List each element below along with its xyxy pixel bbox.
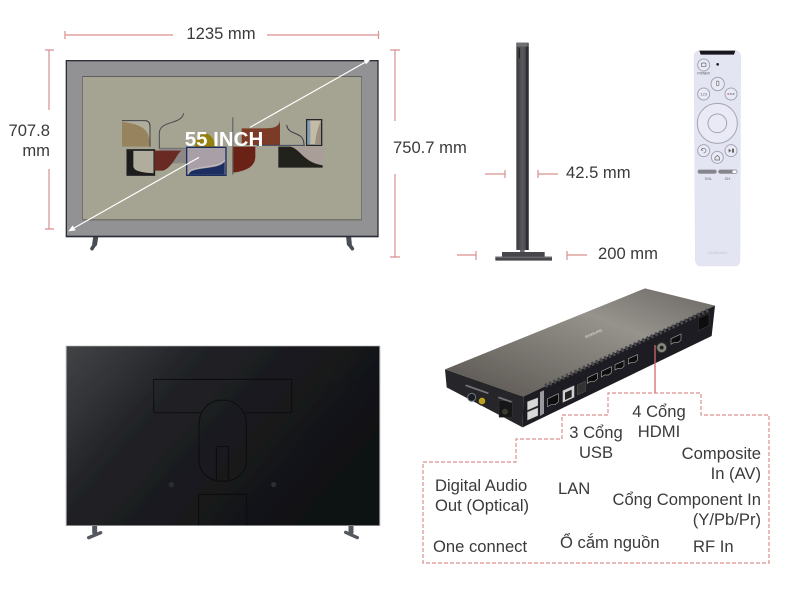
- port label: Digital Audio: Out (Optical): [435, 496, 529, 515]
- connector line to ports: [654, 345, 656, 393]
- TV feet: [92, 237, 352, 249]
- dimension: stand 200 mm: 200 mm: [598, 244, 658, 263]
- port label: Digital Audio: Digital Audio: [435, 476, 527, 495]
- dimension: height 750.7 mm: [390, 50, 467, 257]
- side profile: [495, 43, 552, 261]
- panel: One Connect box: [445, 288, 715, 427]
- artwork: [122, 113, 323, 175]
- back feet: [89, 527, 357, 538]
- volume and channel rockers: VOL: [705, 177, 712, 181]
- dimension: height 750.7 mm: 750.7 mm: [393, 138, 467, 157]
- ports: [466, 314, 709, 420]
- dimension: height 707.8 mm: [8, 50, 54, 229]
- port label: RF In: RF In: [693, 537, 734, 556]
- remote glyphs: 123: [700, 91, 708, 96]
- port label: 4 Cổng HDMI: HDMI: [638, 422, 680, 441]
- port label: One connect: One connect: [433, 537, 527, 556]
- dimension: depth 42.5 mm: [485, 163, 631, 182]
- port label: LAN: LAN: [558, 479, 590, 498]
- dimension: stand 200 mm: [457, 244, 658, 263]
- dashed ports callout: [423, 393, 769, 563]
- panel: front view of TV: [8, 24, 467, 257]
- port label: 3 Cổng USB: 3 Cổng: [569, 423, 623, 442]
- volume and channel rockers: [698, 170, 737, 181]
- port label: Composite In: Composite: [682, 444, 761, 463]
- port label: Composite In: In (AV): [711, 464, 761, 483]
- remote top sensor: [699, 51, 735, 55]
- remote brand: SAMSUNG: [707, 250, 727, 255]
- panel: side view of TV: [457, 43, 658, 263]
- panel: remote control: [694, 51, 741, 266]
- panel: back view of TV: [66, 346, 380, 538]
- diagonal arrow: [68, 59, 371, 231]
- dimension: width 1235 mm: [65, 24, 378, 43]
- volume and channel rockers: CH: [725, 177, 730, 181]
- port label: 4 Cổng HDMI: 4 Cổng: [632, 402, 686, 421]
- port label: 3 Cổng USB: USB: [579, 443, 613, 462]
- port label: power socket: Ổ cắm nguồn: [560, 533, 660, 552]
- label: 55 INCH: 55 INCH: [185, 128, 263, 151]
- port label: Component In: (Y/Pb/Pr): [693, 510, 761, 529]
- remote glyphs: POWER: [697, 72, 711, 76]
- dimension: width 1235 mm: 1235 mm: [186, 24, 256, 43]
- dimension: height 707.8 mm: mm: [22, 141, 50, 160]
- port label: Component In: Cổng Component In: [612, 490, 761, 509]
- back panel recesses: [154, 379, 292, 525]
- box body: [445, 288, 715, 427]
- TV frame with art: [66, 60, 379, 249]
- box body: SAMSUNG: [584, 328, 603, 339]
- vents: [545, 309, 710, 386]
- dimension: height 707.8 mm: 707.8: [8, 121, 50, 140]
- remote glyphs: [697, 63, 734, 160]
- remote buttons: [697, 59, 737, 163]
- dimension: depth 42.5 mm: 42.5 mm: [566, 163, 631, 182]
